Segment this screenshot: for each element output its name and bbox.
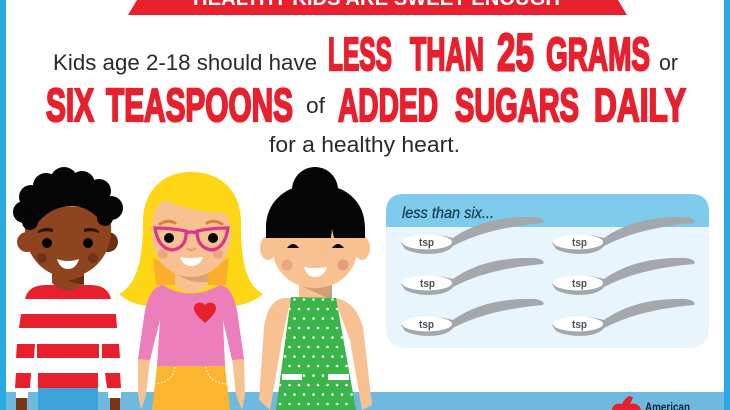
spoon 4 xyxy=(552,217,695,254)
headline line 1: THAN xyxy=(410,28,484,80)
icon: heart xyxy=(194,303,216,323)
boy smile xyxy=(57,259,79,269)
headline line 2: of xyxy=(306,93,326,118)
left blue border xyxy=(0,0,6,410)
character: girl in green dress xyxy=(259,167,372,410)
dress girl bun xyxy=(292,167,338,213)
dress girl face xyxy=(272,230,358,288)
boy neck xyxy=(52,265,84,290)
spoon 3: tsp xyxy=(419,319,434,331)
panel body xyxy=(386,194,709,348)
spoon 5 xyxy=(552,258,695,295)
headline line 1: 25 xyxy=(497,24,534,82)
girl face xyxy=(152,200,231,277)
headline line 2: TEASPOONS xyxy=(106,79,293,131)
spoon 2 xyxy=(401,258,544,295)
girl inner hair xyxy=(153,258,229,285)
headline line 1: GRAMS xyxy=(546,28,650,80)
spoon 1: tsp xyxy=(419,237,434,249)
girl hair xyxy=(119,172,263,306)
spoon 2: tsp xyxy=(420,278,435,290)
girl eyes xyxy=(164,233,174,243)
girl shirt xyxy=(138,285,244,366)
panel: spoons xyxy=(386,194,709,348)
bottom blue band xyxy=(0,392,730,410)
boy trousers xyxy=(38,388,98,410)
dress girl arms xyxy=(259,298,372,410)
boy hair xyxy=(13,167,123,230)
dress girl hair xyxy=(266,184,365,238)
headline line 2 xyxy=(46,79,686,131)
girl nose xyxy=(187,248,196,250)
headline line 1 xyxy=(53,24,678,82)
girl cheeks xyxy=(158,249,168,259)
spoon 6 xyxy=(552,299,695,336)
panel header xyxy=(386,194,709,227)
boy eyebrows, eyes and cheeks xyxy=(37,228,99,263)
headline line 2: SUGARS xyxy=(455,79,579,131)
girl eyebrows xyxy=(160,221,222,224)
girl legs and arms xyxy=(138,358,245,410)
dress girl cheeks xyxy=(282,260,292,270)
spoon 3 xyxy=(401,299,544,336)
character: boy in striped shirt xyxy=(13,167,123,410)
boy hands xyxy=(16,398,120,410)
spoon 6: tsp xyxy=(572,319,587,331)
girl skirt xyxy=(152,366,230,410)
headline line 1: Kids age 2-18 should have xyxy=(53,50,317,75)
headline line 2: DAILY xyxy=(594,79,686,131)
dress girl eyes xyxy=(287,244,344,248)
dress girl smile xyxy=(304,267,327,277)
logo torch heart xyxy=(612,396,641,410)
girl smile xyxy=(180,257,203,266)
headline line 2: ADDED xyxy=(338,79,438,131)
girl pocket stitching xyxy=(153,367,228,384)
boy face xyxy=(25,206,111,277)
character: girl with glasses xyxy=(119,172,263,410)
boy ears xyxy=(17,232,37,252)
headline line 2: SIX xyxy=(46,79,94,131)
dress pockets xyxy=(282,374,349,380)
girl glasses xyxy=(155,228,228,250)
logo: American Heart Association xyxy=(612,396,690,410)
dress girl neck xyxy=(299,280,332,302)
right blue border xyxy=(724,0,730,410)
boy striped shirt xyxy=(15,285,121,388)
title banner xyxy=(128,0,627,15)
spoon 5: tsp xyxy=(572,278,587,290)
boy white cuffs xyxy=(16,388,121,398)
spoon 1 xyxy=(401,217,544,254)
spoon 4: tsp xyxy=(572,237,587,249)
headline line 1: or xyxy=(659,50,678,75)
dress girl dress xyxy=(276,297,356,410)
girl neck xyxy=(175,270,208,292)
dress girl ears xyxy=(260,236,276,260)
headline line 1: LESS xyxy=(328,28,392,80)
headline line 3: for a healthy heart. xyxy=(269,132,460,157)
panel heading: less than six... xyxy=(402,205,494,222)
